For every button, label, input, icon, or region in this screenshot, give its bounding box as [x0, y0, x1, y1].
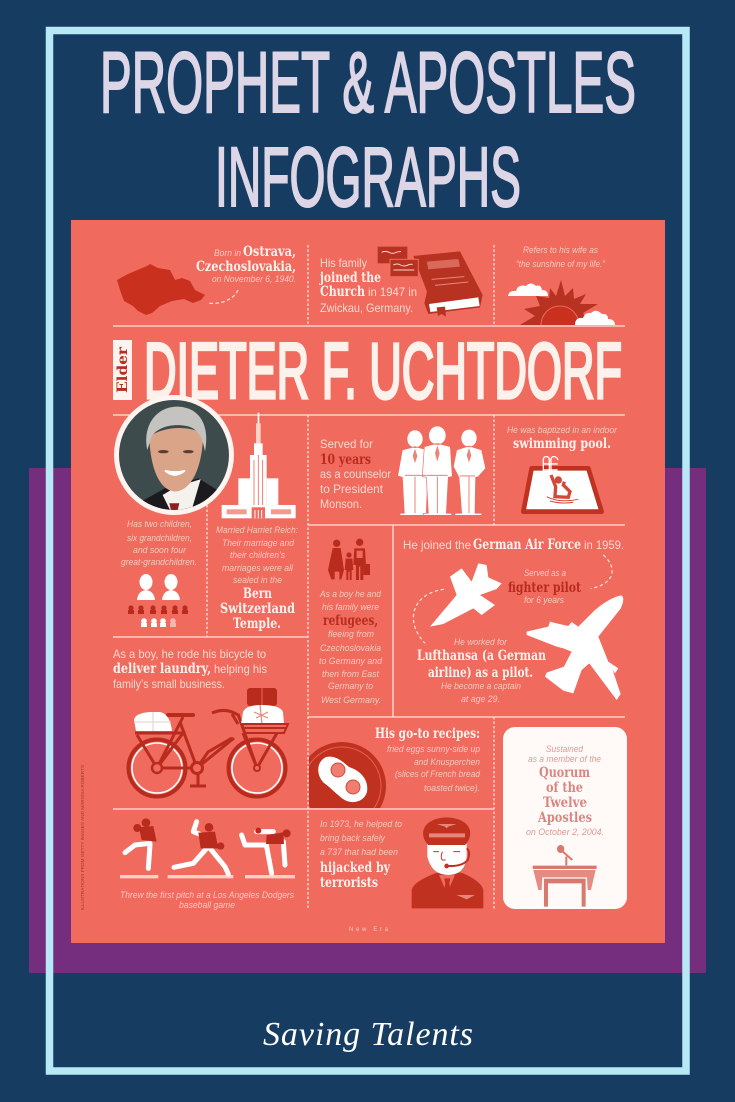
text: air force	[403, 537, 624, 553]
icon: refugee family	[328, 539, 370, 580]
icon: fighter jet	[430, 563, 502, 627]
icon: three men in suits	[398, 426, 486, 515]
text: recipes: fried eggs sunny-side up	[387, 744, 480, 755]
icon: podium with microphone	[533, 845, 597, 907]
text: New Era: New Era	[349, 927, 389, 933]
text: sustained: Sustained	[546, 744, 584, 755]
text: recipes: toasted twice).	[424, 783, 480, 794]
text: grandchildren: six grandchildren,	[127, 533, 192, 544]
text: counselor: Monson.	[320, 497, 362, 511]
block: birthplace	[117, 244, 296, 315]
text: first pitch	[120, 890, 294, 911]
text: sustained: Apostles	[537, 810, 592, 826]
text: joined the Church: in 1947 in	[368, 285, 417, 299]
text: sustained: Twelve	[543, 795, 587, 811]
text: sunshine quote: Refers to his wife as	[523, 245, 598, 256]
icon: pool	[523, 457, 602, 512]
text: birthplace: Born in	[214, 248, 241, 259]
block: recipes	[309, 728, 480, 808]
text: joined the Church: His family	[320, 256, 367, 270]
block: joined the Church	[319, 247, 483, 317]
text: temple marriage: sealed in the	[233, 575, 282, 586]
text: air force: in 1959.	[584, 538, 624, 552]
text: air force: German Air Force	[473, 537, 581, 553]
text: swimming pool	[507, 425, 618, 452]
text: temple marriage: Their marriage and	[222, 538, 295, 549]
text: Lufthansa	[417, 637, 546, 705]
text: counselor: to President	[320, 482, 384, 496]
text: swimming pool: swimming pool.	[513, 436, 611, 452]
text: sustained	[526, 744, 604, 838]
icon: airliner	[527, 595, 623, 700]
text: temple marriage: Switzerland	[220, 601, 295, 617]
text: swimming pool: He was baptized in an indoor	[507, 425, 618, 436]
text: refugees: to Germany and	[319, 656, 383, 667]
text: counselor	[320, 437, 391, 511]
arrow: map pointer	[207, 290, 238, 303]
text: temple marriage	[216, 525, 298, 632]
text: refugees	[319, 589, 383, 706]
text: grandchildren: Has two children,	[127, 519, 192, 530]
icon: sun and clouds	[508, 280, 615, 325]
text: sustained: as a member of the	[528, 754, 601, 765]
text: laundry: family’s small business.	[113, 677, 225, 691]
arrow: to fighter pilot	[591, 555, 612, 589]
text: sustained: Quorum	[539, 765, 590, 781]
heading: Elder label: Elder	[115, 346, 131, 393]
text: sustained: of the	[546, 780, 583, 796]
portrait	[114, 395, 234, 515]
text: grandchildren: great-grandchildren.	[121, 557, 197, 568]
text: refugees: fleeing from	[328, 629, 374, 640]
text: refugees: As a boy he and	[319, 589, 382, 600]
text: hijacked: In 1973, he helped to	[320, 819, 402, 830]
icon: bicycle with laundry	[128, 688, 288, 796]
block: grandchildren	[121, 519, 197, 627]
text: recipes	[375, 726, 481, 794]
text: counselor: Served for	[320, 437, 373, 451]
text: Lufthansa: He worked for	[454, 637, 508, 648]
text: fighter pilot: fighter pilot	[508, 580, 582, 596]
text: sunshine quote: “the sunshine of my life.”	[516, 259, 606, 270]
text: refugees: Czechoslovakia	[320, 643, 381, 654]
text: Lufthansa: airline) as a pilot.	[428, 665, 533, 681]
text: sunshine quote	[516, 245, 606, 270]
text: recipes: His go-to recipes:	[375, 726, 480, 742]
text: laundry: helping his	[214, 662, 267, 676]
text: refugees: his family were	[322, 602, 379, 613]
text: refugees: then from East	[322, 669, 379, 680]
text: temple marriage: Bern	[243, 586, 272, 602]
text: Lufthansa: at age 29.	[461, 694, 500, 705]
text: hijacked: bring back safely	[320, 833, 386, 844]
block: sunshine	[508, 245, 615, 325]
text: temple marriage: marriages were all	[222, 563, 294, 574]
text: counselor: as a counselor	[320, 467, 391, 481]
block: hijacked	[320, 817, 483, 908]
text: sustained: on October 2, 2004.	[526, 827, 604, 838]
text: birthplace	[196, 244, 296, 285]
heading: Elder label	[113, 340, 132, 400]
text: first pitch: Threw the first pitch at a Los Angeles Dodgers	[120, 890, 294, 901]
title	[100, 35, 636, 224]
icon: three pitchers	[120, 818, 295, 877]
text: recipes: and Knusperchen	[414, 757, 480, 768]
text: counselor: 10 years	[320, 452, 371, 468]
icon: Czech map	[117, 264, 205, 315]
block: air force	[403, 537, 624, 705]
text: temple marriage: Married Harriet Reich:	[216, 525, 298, 536]
text: hijacked	[320, 819, 402, 891]
text: air force: He joined the	[403, 538, 471, 552]
icon: family figures	[128, 574, 188, 627]
arrow: to Lufthansa	[413, 589, 444, 643]
icon: temple	[222, 413, 296, 518]
text: refugees: Germany to	[328, 681, 373, 692]
icon: book and cards	[378, 247, 483, 317]
text: grandchildren	[121, 519, 197, 568]
text: refugees: refugees,	[323, 613, 378, 629]
text: joined the Church: Church	[320, 284, 365, 300]
text: temple marriage: Temple.	[233, 616, 281, 632]
text: fighter pilot: Served as a	[524, 568, 566, 579]
text: birthplace: Czechoslovakia,	[196, 259, 296, 275]
text: Saving Talents signature: Saving Talents	[263, 1016, 473, 1053]
text: birthplace: on November 6, 1940.	[212, 274, 296, 285]
text: hijacked: terrorists	[320, 875, 378, 891]
purple backing band	[29, 468, 706, 973]
text: laundry: As a boy, he rode his bicycle to	[113, 647, 266, 661]
text: fighter pilot	[508, 568, 582, 606]
icon: airline pilot	[412, 817, 483, 908]
text: illustration credit: ILLUSTRATIONS FROM GETTY IMAGES AND MARISSA ROBERTS	[80, 765, 85, 910]
text: recipes: (slices of French bread	[395, 769, 481, 780]
text: hijacked: hijacked by	[320, 860, 391, 876]
text: Lufthansa: Lufthansa (a German	[417, 648, 546, 664]
block: counselor	[320, 426, 486, 515]
text: joined the Church: joined the	[319, 270, 381, 286]
text: hijacked: a 737 that had been	[320, 847, 398, 858]
text: laundry	[113, 647, 267, 691]
block: baseball first pitch	[120, 818, 295, 911]
card: Quorum of the Twelve Apostles	[503, 727, 627, 909]
panel: infographic poster	[71, 220, 665, 943]
text: refugees: West Germany.	[321, 695, 381, 706]
text: first pitch: baseball game	[179, 900, 235, 911]
text: fighter pilot: for 6 years	[524, 595, 564, 606]
text: birthplace: Ostrava,	[243, 244, 296, 260]
block: swimming pool	[507, 425, 618, 512]
block: refugees	[319, 539, 383, 706]
text: Lufthansa: He become a captain	[441, 681, 521, 692]
text: joined the Church: Zwickau, Germany.	[320, 301, 413, 315]
icon: fried eggs in pan	[309, 742, 386, 808]
text: temple marriage: their children’s	[230, 550, 285, 561]
text: joined the Church	[319, 256, 417, 315]
text: laundry: deliver laundry,	[113, 661, 211, 677]
text: grandchildren: and soon four	[133, 545, 187, 556]
